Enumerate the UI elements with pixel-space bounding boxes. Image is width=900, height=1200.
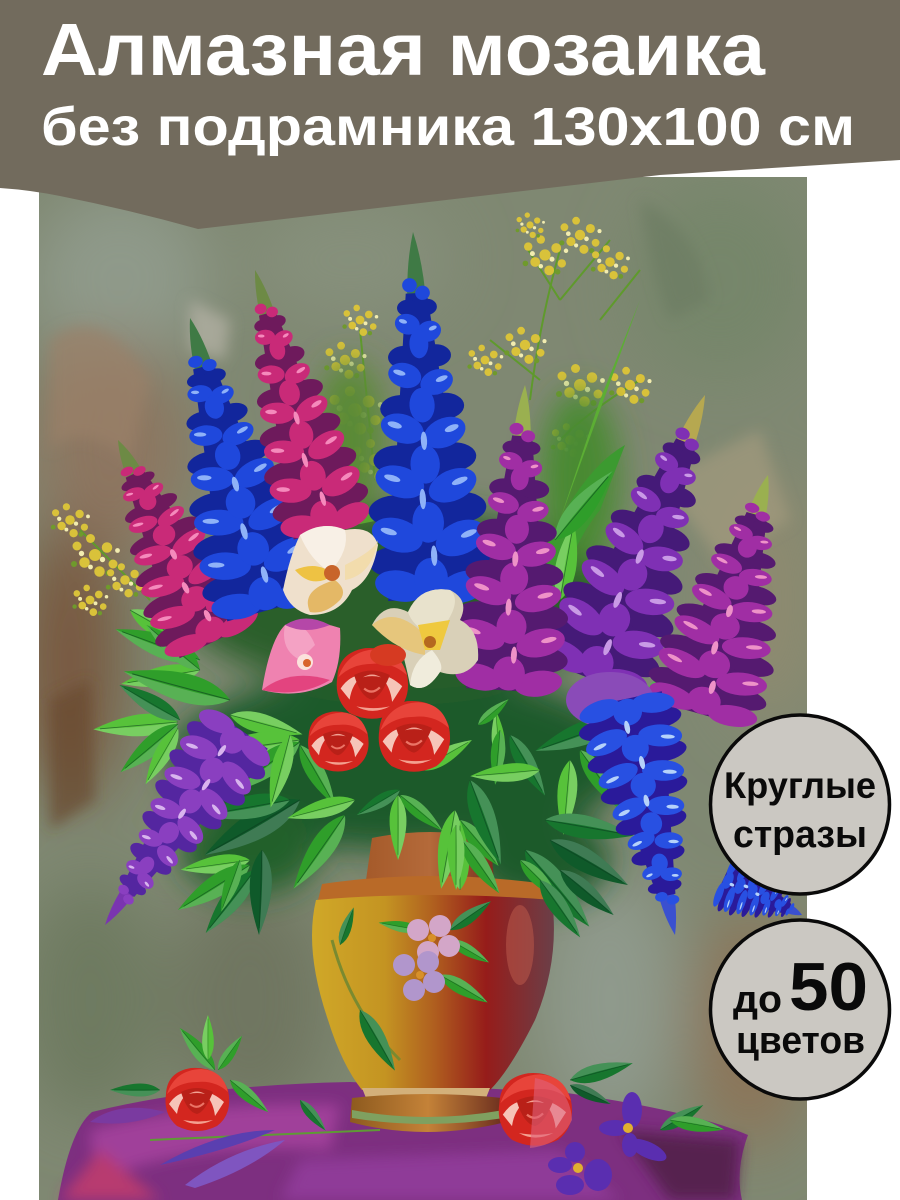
flower: lower right rose [379, 701, 450, 772]
flowers on the table [90, 1015, 725, 1195]
spike: right purple [554, 395, 705, 686]
table with purple cloth [58, 1082, 748, 1200]
flower: top rose [337, 648, 408, 719]
spike: small lower right [713, 864, 802, 918]
badge: up to 50 colours: цветов [736, 1020, 865, 1062]
flower: rose top petal [370, 644, 406, 666]
badge: round rhinestones: Круглые [724, 765, 876, 806]
badge: up to 50 colours: 50 [789, 949, 868, 1025]
spike: small purple behind blue [566, 672, 654, 728]
spike: upper pink [254, 270, 370, 540]
title: Алмазная мозаика [41, 8, 766, 91]
spike: center magenta [456, 386, 568, 697]
spike: hanging blue [579, 691, 688, 935]
badge: up to 50 colours [710, 920, 890, 1099]
lupine spikes [105, 232, 802, 935]
painting: bouquet of lupines in a vase [20, 177, 828, 1200]
yellow wildflowers [51, 212, 652, 616]
vase painted flowers [332, 896, 495, 1075]
lower foliage [94, 670, 634, 938]
flower: pink [262, 618, 340, 694]
spike: center blue [368, 232, 490, 603]
vase [312, 832, 554, 1132]
flower: upper cream [283, 526, 378, 615]
subtitle: без подрамника 130х100 см [41, 97, 855, 157]
upper foliage [111, 300, 714, 709]
badge: up to 50 colours: до [733, 979, 782, 1021]
bouquet dark foliage mass [170, 360, 630, 905]
badge: round rhinestones: стразы [733, 814, 867, 856]
spike: hanging purple [105, 709, 270, 925]
spike: left blue [186, 318, 298, 622]
spike: left pink [118, 440, 258, 658]
spike: far right purple [649, 475, 776, 727]
header banner [0, 0, 900, 229]
badge: round rhinestones [710, 715, 890, 894]
flower: lower left rose [308, 711, 369, 771]
painted background [20, 177, 820, 1200]
central flowers [262, 526, 478, 772]
flower: lower cream [372, 589, 478, 688]
